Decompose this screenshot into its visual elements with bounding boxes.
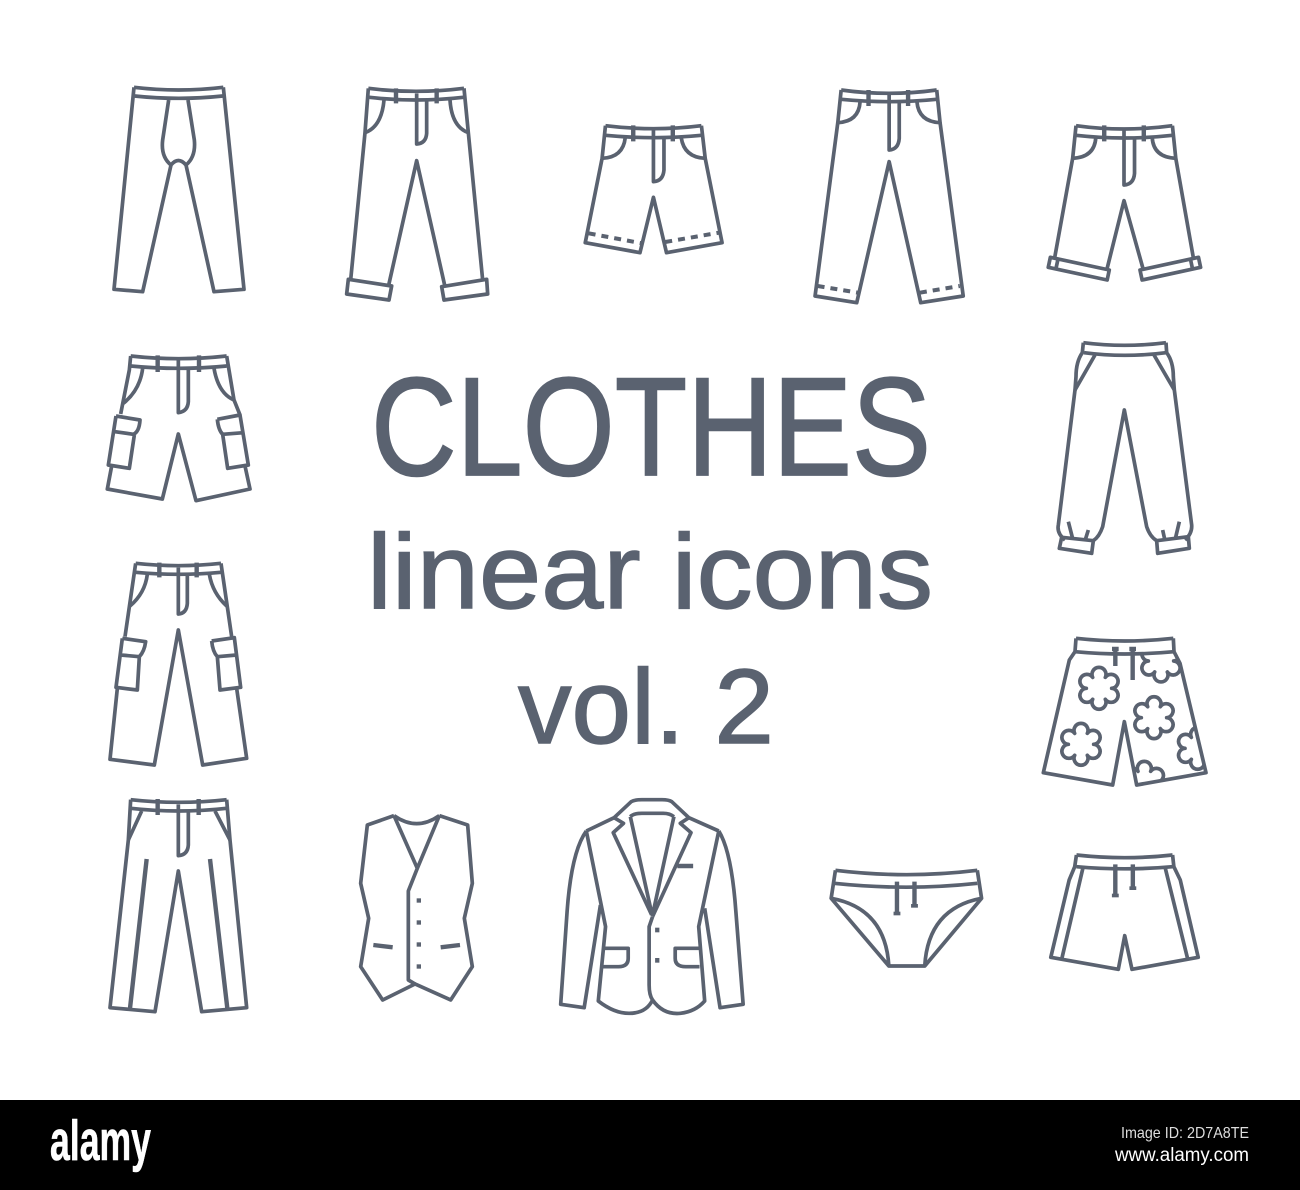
icon: cuffed trousers [347,88,488,300]
icon: sports shorts [1051,855,1198,969]
footer text: website: www.alamy.com [1114,1145,1249,1166]
icon: cargo shorts [107,355,250,501]
icon: long johns [114,87,244,292]
subheading: linear icons: linear icons [367,513,933,631]
title block [367,348,933,766]
heading: CLOTHES: CLOTHES [371,348,931,505]
footer text: image ID: Image ID: 2D7A8TE [1121,1125,1249,1142]
icon: swim briefs [831,870,982,966]
icon: waistcoat [361,816,472,1000]
icon: denim shorts [585,125,722,253]
icon: blazer [561,800,743,1013]
footer bar [0,1100,1300,1190]
icon: cargo trousers [110,563,247,765]
icon: suit trousers [110,799,247,1012]
subheading: vol. 2: vol. 2 [518,648,774,766]
icon: floral swim shorts [1041,636,1208,787]
icon: straight jeans [815,90,963,303]
footer logo: alamy: alamy [50,1109,151,1173]
icon: cuffed shorts [1048,125,1201,280]
icon: jogger trousers [1058,343,1192,553]
